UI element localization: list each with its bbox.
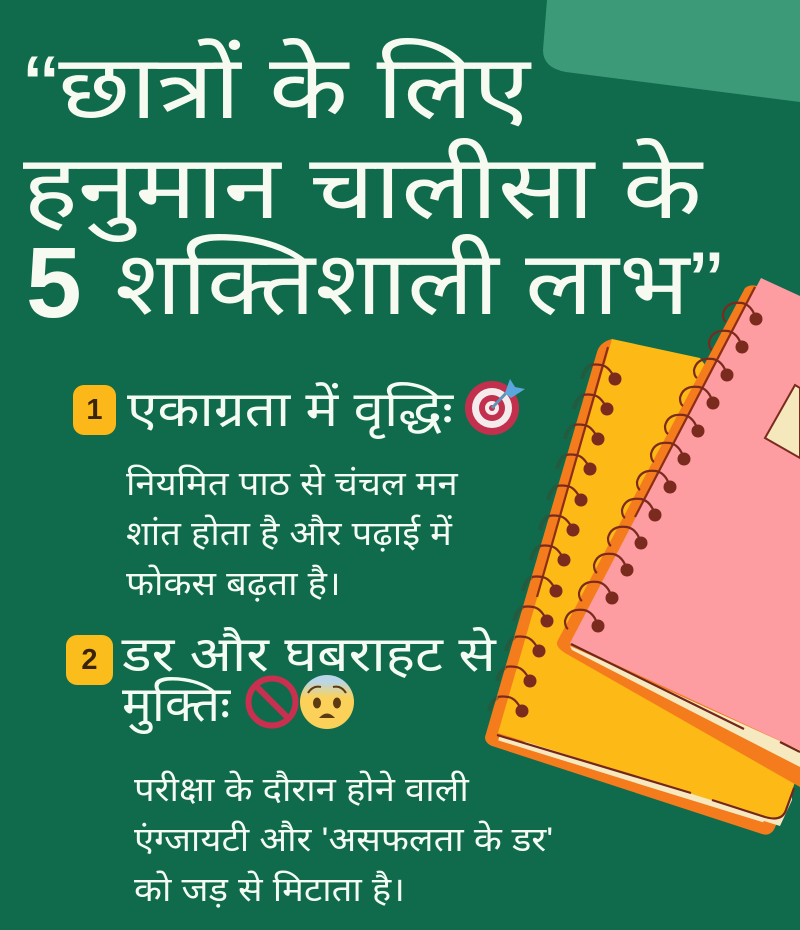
body text 2: को जड़ से मिटाता है।: [134, 871, 405, 909]
heading 2: मुक्तिः: [122, 678, 230, 732]
pink notebook: [557, 278, 800, 787]
body text 1: नियमित पाठ से चंचल मन: [126, 465, 458, 503]
heading 1: एकाग्रता में वृद्धिः: [127, 383, 453, 437]
body text 1: फोकस बढ़ता है।: [126, 565, 341, 603]
body text 2: परीक्षा के दौरान होने वाली: [134, 771, 469, 809]
body text 1: शांत होता है और पढ़ाई में: [126, 515, 452, 553]
badge 1: 1: [86, 394, 103, 426]
title: 5: [26, 227, 82, 339]
title: शक्तिशाली: [115, 233, 499, 333]
heading 2: डर और घबराहट से: [122, 628, 496, 682]
body text 2: [134, 770, 553, 909]
body text 1: [126, 464, 458, 603]
badge 2: [66, 635, 113, 685]
icon: target: [465, 379, 525, 435]
badge 1: [73, 385, 116, 435]
icon: fearful face: [300, 675, 354, 729]
icon: prohibited: [246, 676, 298, 728]
body text 2: एंग्जायटी और 'असफलता के डर': [134, 821, 553, 859]
title: हनुमान चालीसा के: [23, 137, 702, 237]
badge 2: 2: [81, 644, 98, 676]
yellow notebook: [485, 339, 795, 835]
heading 2: [121, 627, 497, 734]
title: [23, 37, 723, 339]
title: “छात्रों के लिए: [24, 37, 530, 137]
title: लाभ”: [525, 233, 723, 333]
